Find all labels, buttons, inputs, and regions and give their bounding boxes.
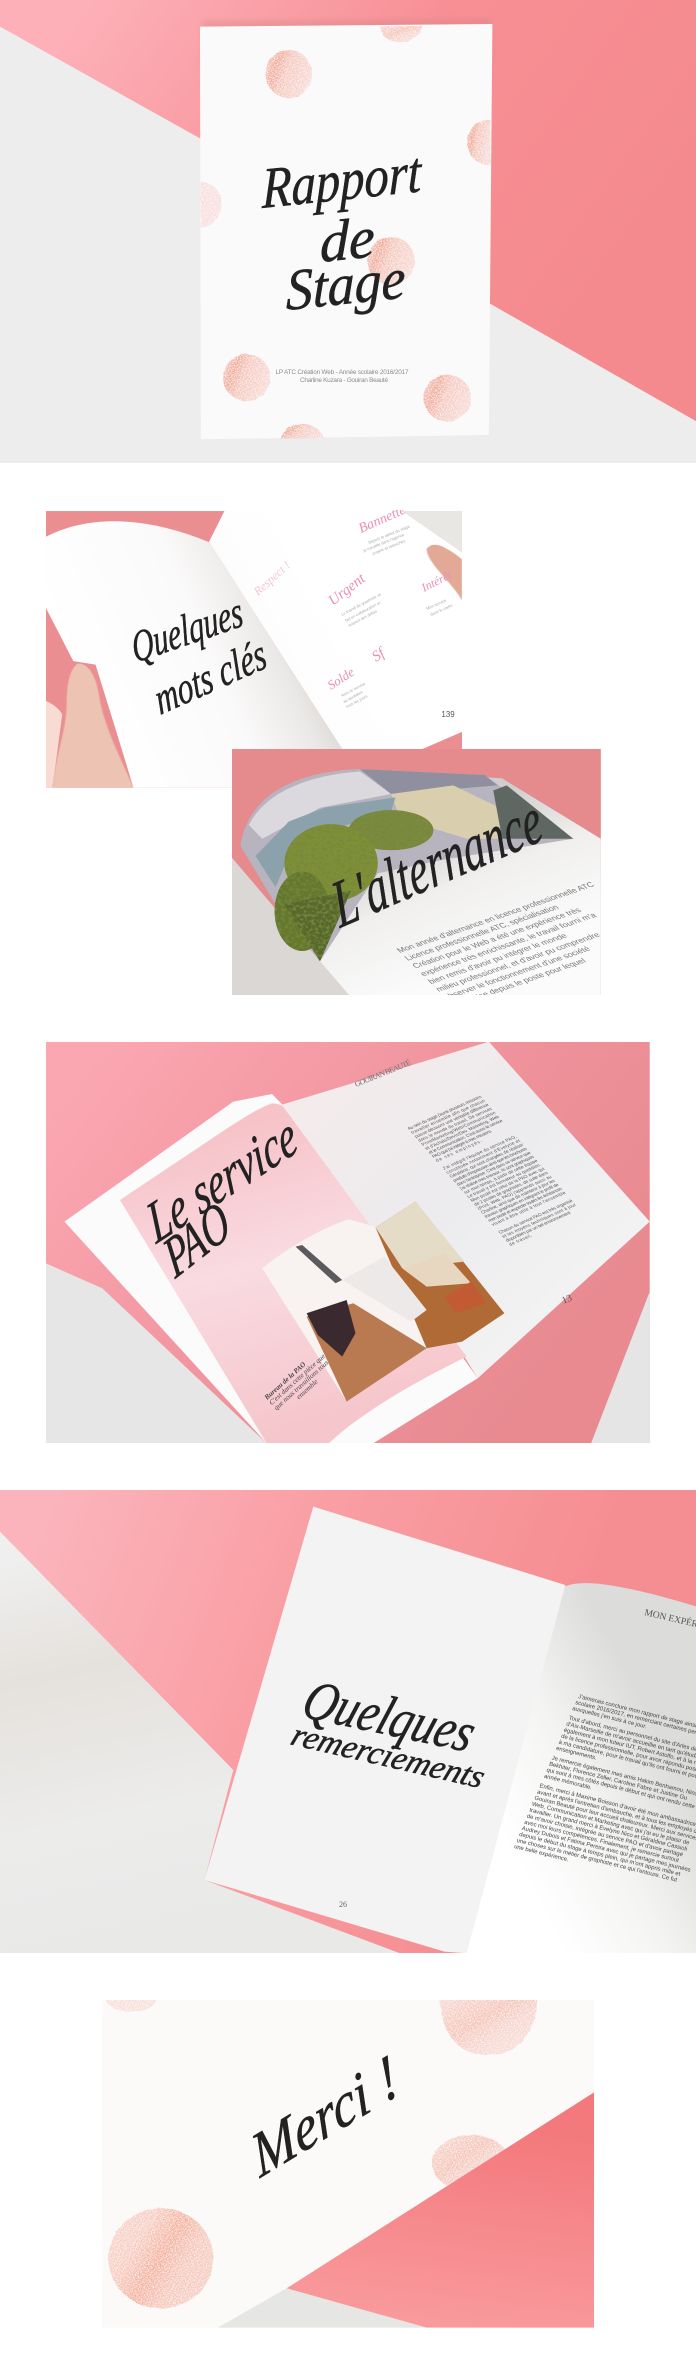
body text: bien remis d'avoir pu intégrer le monde: [425, 931, 569, 986]
body text: produits d'impression ainsi que les brochures: [452, 1146, 529, 1183]
body text: visant à être utile à tout l'ensemble: [490, 1190, 567, 1227]
keyword labels: [250, 503, 454, 693]
panel: keywords spread photo: [46, 510, 462, 788]
right page: [281, 1042, 650, 1378]
page number: 13: [560, 1293, 574, 1307]
body text: de 2 postes de graphistes, de suite dans: [473, 1170, 550, 1207]
background: grey paper right: [591, 1292, 650, 1443]
background: pink: [46, 511, 462, 788]
top-right table corner: [402, 511, 462, 552]
body text: j'ai réalisé mes travaux, ils sont graphiques: [458, 1154, 536, 1191]
right page: [462, 1583, 696, 1953]
body text: Géraldine, qui sont chargées de réaliser: [448, 1142, 525, 1179]
body text: J'ai intégré l'équipe du service PAO,: [441, 1134, 518, 1171]
heading: Quelques mots clés: mots clés: [149, 629, 271, 725]
photo: office chair: [307, 1300, 356, 1357]
photo: desk and wall patch: [402, 1253, 471, 1287]
left page: [232, 858, 351, 998]
body text: Le travail y est formateur au quotidien.: [466, 1162, 542, 1199]
keyword descriptions: au quotidien: [342, 689, 364, 704]
background: grey paper: [0, 27, 696, 463]
photo caption: Bureau de la PAO: [262, 1360, 307, 1402]
title: Rapport de Stage: de: [320, 204, 375, 275]
text: credits: Charline Kuzara - Gouiran Beauté: [300, 377, 388, 384]
body text: Charline, ainsi que de maintenir à jour les: [480, 1178, 557, 1215]
body text: [513, 1688, 696, 1896]
body text: avant et après l'entretien d'embauche, et à tous les employés de: [536, 1789, 696, 1836]
body text: Audrey Dubois et Fatima Pereira avec qui je partage mes journées: [521, 1826, 691, 1874]
background: pink paper: [0, 0, 696, 463]
background: grey paper left: [46, 1263, 267, 1443]
body text: sur mon temps, à partir de cette équipe: [462, 1158, 539, 1195]
body text: expérience très enrichissante, le travail fourni m'a: [418, 911, 599, 978]
heading: Quelques mots clés: [128, 587, 271, 725]
body text: dans l'entreprise. C'est dans ce service que: [455, 1150, 532, 1187]
body text: [405, 1094, 585, 1247]
panel: Merci back cover photo: [105, 2000, 594, 2328]
heading: Quelques mots clés: Quelques: [128, 587, 247, 673]
body text: une belle expérience.: [513, 1844, 569, 1864]
body text: auxquelles j'en suis à ce jour.: [571, 1706, 647, 1730]
keyword labels: Respect !: [250, 558, 293, 599]
background: pink: [232, 746, 601, 998]
icon: right fingers: [427, 545, 462, 601]
background: pink: [46, 1042, 650, 1443]
body text: année mémorable.: [543, 1774, 593, 1791]
body text: enseignements.: [555, 1746, 598, 1762]
body text: (Print, Web, PAO) j'apprends aussi au: [476, 1174, 553, 1211]
right page: [242, 769, 601, 998]
photo: clouds: [249, 772, 391, 839]
body text: qui sont à mes côtés depuis le début et qui ont rendu cette: [546, 1768, 696, 1811]
body text: puisse découvrir une véritable différence: [413, 1102, 490, 1139]
page number: 139: [441, 710, 455, 719]
watercolour dots: [201, 26, 490, 439]
keyword descriptions: [340, 523, 454, 709]
grey paper: [218, 2288, 427, 2328]
back cover page: [102, 2000, 594, 2328]
left page: [204, 1507, 565, 1953]
keyword descriptions: Mon service: [425, 597, 448, 611]
text: credits: LP ATC Création Web - Année scolaire 2016/2017: [276, 369, 409, 376]
photo: glass windows: [256, 797, 396, 887]
photo: dark tree at the right: [493, 785, 573, 839]
title: Rapport de Stage: [261, 139, 423, 323]
panel: alternance spread photo: [232, 749, 601, 995]
background: pink: [0, 1490, 696, 1953]
keyword descriptions: Le travail de graphiste se: [340, 591, 383, 617]
keyword labels: Sf: [369, 644, 389, 665]
body text: Mon année d'alternance en licence professionnelle ATC: [394, 880, 596, 954]
background: grey paper: [0, 1532, 400, 1953]
body text: Mon poste est celui de la PAO avec qui: [469, 1166, 546, 1203]
body text: Je remercie également mes amis Hakim Benhamou, Nina: [551, 1755, 696, 1798]
body text: travailler ensemble afin que chacun: [410, 1098, 487, 1135]
body text: une choses sur le métier de graphiste et ce qui l'entoure. Ce fut: [516, 1838, 678, 1884]
cover shadow: [202, 19, 491, 67]
keyword labels: Urgent: [326, 570, 369, 609]
book outer white edge: [64, 1094, 478, 1443]
photo: building: [391, 785, 573, 839]
body text: et le Communication. C'est aussi le service: [427, 1118, 504, 1155]
keyword descriptions: respect des délais: [347, 608, 378, 628]
title: Rapport de Stage: Stage: [286, 245, 405, 323]
body text: disponibles par un bel environnement: [504, 1210, 572, 1243]
body text: [393, 880, 659, 1017]
booklet cover page: [200, 24, 492, 439]
keyword descriptions: tous les jours: [345, 693, 368, 709]
body text: Web, Communication et Marketing avec qui j'ai eu le plaisir de: [531, 1802, 691, 1847]
photo caption: [262, 1347, 336, 1418]
keyword descriptions: fait en collaboration et: [344, 600, 382, 623]
heading: Quelques remerciements: [286, 1670, 490, 1796]
photo: desk papers: [342, 1257, 427, 1322]
body text: travailler. Un grand merci à Evelyne Nico et Géraldine Cassioli: [529, 1808, 688, 1853]
body text: constituée notamment d'Evelyne et: [445, 1138, 522, 1175]
running header: GOUIRAN BEAUTÉ: [353, 1057, 412, 1089]
photo: sky: [240, 769, 573, 961]
body text: dans le monde du travail. De services: [417, 1106, 494, 1143]
body text: Print/Marketing/Web/Communication: [420, 1110, 497, 1147]
left pink page: [120, 1103, 467, 1443]
heading: Le service PAO: Le service: [139, 1102, 305, 1257]
body text: mon poste et respecter toutes les échéances: [487, 1186, 564, 1223]
text: credits: [276, 369, 409, 384]
keyword descriptions: Avec le service: [340, 681, 367, 698]
keyword descriptions: je travaille dans l'agence: [362, 532, 406, 553]
photo: dark sky: [360, 769, 498, 794]
background: pale paper under hand: [46, 701, 62, 788]
keyword labels: Intérêt: [418, 567, 454, 595]
keyword descriptions: Depuis le début du stage: [368, 523, 411, 545]
keyword labels: Solde: [324, 664, 357, 693]
photo caption: ensemble: [295, 1378, 320, 1401]
body text: Enfin, merci à Maxime Boisson d'avoir été mon ambassadrice: [539, 1783, 696, 1828]
photo: trees: [275, 810, 433, 961]
pink paper: [287, 2092, 594, 2328]
body text: Chacun du service PAO est très organisé: [497, 1198, 574, 1235]
body text: Création pour le Web a été une expérience très: [410, 906, 583, 970]
heading: Le service PAO: [139, 1102, 305, 1291]
heading: Le service PAO: PAO: [154, 1188, 238, 1291]
keyword descriptions: dans le cadre: [429, 602, 454, 617]
body text: milieu professionnel, et d'avoir pu comprendre: [433, 930, 601, 993]
photo: right wall: [376, 1202, 464, 1268]
body text: et d'Achats/Devis/Dev. Marketing, Web: [424, 1114, 501, 1151]
body text: avec moi leurs compétences. Finalement, je remercie surtout: [524, 1820, 680, 1864]
watercolour dots: [104, 1997, 539, 2308]
heading: Merci !: Merci !: [243, 2042, 406, 2192]
panel: service PAO spread photo: [46, 1042, 650, 1443]
keyword descriptions: projets et retouches: [372, 538, 406, 556]
body text: travaux graphiques en intégrant le profil de: [483, 1182, 560, 1219]
photo caption: que nous travaillons tous: [272, 1359, 330, 1412]
body text: depuis le début du stage à temps plein, qui m'ont appris mille et: [518, 1832, 681, 1878]
photo: window frame: [296, 1245, 342, 1283]
body text: Au sein du stage j'aurai plusieurs missions: [406, 1094, 483, 1131]
right page: [209, 511, 462, 788]
heading: Quelques remerciements: Quelques: [295, 1670, 484, 1764]
body text: de ses employés.: [434, 1139, 483, 1163]
title: Rapport de Stage: Rapport: [261, 139, 423, 221]
panel: booklet cover photo: [0, 0, 696, 463]
panel: acknowledgements spread photo: [0, 1490, 696, 1953]
body text: de m'avoir choisie, intégrée au service PAO et d'avoir partagé: [526, 1814, 684, 1859]
body text: PAO que j'ai intégré à mes missions: [431, 1129, 493, 1159]
photo: right wall and wood furniture base: [376, 1202, 504, 1348]
heading: Quelques remerciements: remerciements: [286, 1717, 490, 1796]
page number: 26: [339, 1900, 347, 1909]
photo: office left white wall: [262, 1219, 427, 1402]
photo: office floor: [307, 1303, 427, 1402]
photo caption: C'est dans cette pièce que: [268, 1352, 327, 1407]
body text: Licence professionnelle ATC, spécialisation: [402, 903, 561, 962]
body text: Gouiran Beauté pour leur accueil chaleureux. Merci aux services: [534, 1796, 696, 1842]
body text: et les moyens techniques sont à jour: [501, 1202, 578, 1239]
icon: left hand: [52, 664, 133, 788]
body text: de travail.: [508, 1233, 533, 1247]
body text: Bekhiter, Florence Zeller, Caroline Fabre et Justine Gu: [548, 1762, 688, 1802]
left page: [46, 521, 347, 788]
